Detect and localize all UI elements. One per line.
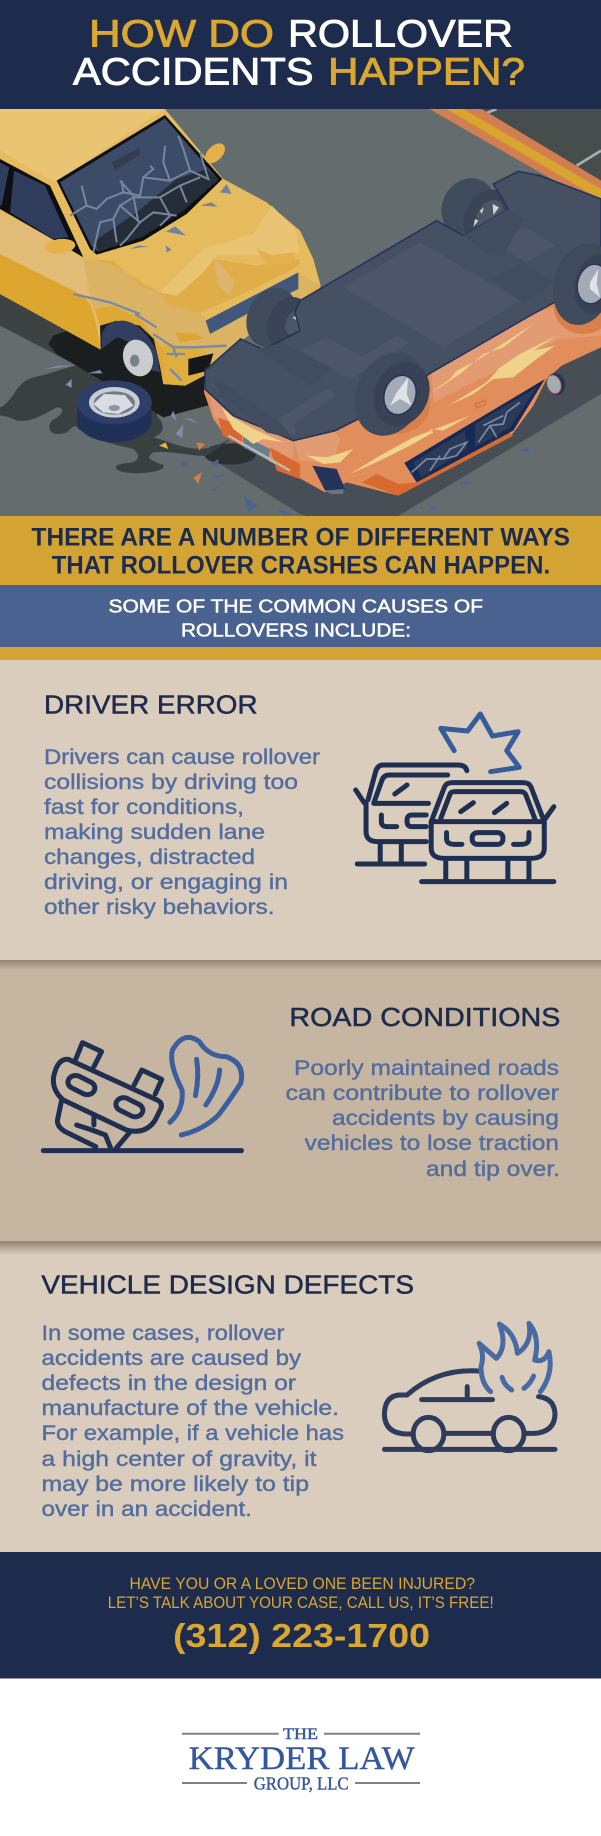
side windows xyxy=(0,159,83,257)
text: vehicle design defects: manufacture of the vehicle. xyxy=(42,1397,339,1420)
text: driver error: driving, or engaging in xyxy=(44,871,288,894)
windshield xyxy=(57,115,222,255)
statement text: THAT ROLLOVER CRASHES CAN HAPPEN. xyxy=(52,552,550,580)
logo: the kryder law group: GROUP, LLC xyxy=(254,1773,349,1793)
gold divider strip xyxy=(0,647,601,660)
panel: road conditions xyxy=(0,960,601,1241)
heading: vehicle design defects: VEHICLE DESIGN DEFECTS xyxy=(41,1269,414,1299)
causes text: ROLLOVERS INCLUDE: xyxy=(181,620,411,641)
call to action footer xyxy=(0,1552,601,1678)
orange car xyxy=(204,169,601,496)
headlight block xyxy=(312,466,345,494)
mirrors xyxy=(44,238,76,254)
text: vehicle design defects: In some cases, rollover xyxy=(42,1322,284,1345)
text: vehicle design defects: over in an accident. xyxy=(42,1498,252,1521)
panel: driver error xyxy=(0,660,601,960)
text: road conditions: and tip over. xyxy=(426,1158,560,1181)
title text: HOW DO xyxy=(89,14,274,56)
statement text: THERE ARE A NUMBER OF DIFFERENT WAYS xyxy=(32,524,570,552)
icon: burning car xyxy=(384,1323,555,1451)
blue causes band xyxy=(0,585,601,647)
underside xyxy=(205,171,601,441)
text: vehicle design defects: may be more likely to tip xyxy=(42,1473,309,1496)
call to action text: HAVE YOU OR A LOVED ONE BEEN INJURED? xyxy=(130,1574,475,1593)
license plate and chrome bar xyxy=(228,436,290,471)
heading: driver error: DRIVER ERROR xyxy=(44,689,258,719)
cracked bumper xyxy=(73,294,227,381)
logo: the kryder law group xyxy=(0,1678,601,1836)
phone number: (312) 223-1700 xyxy=(173,1617,430,1654)
text: road conditions: accidents by causing xyxy=(332,1107,559,1130)
wheels behind body xyxy=(237,169,518,355)
text: driver error: changes, distracted xyxy=(44,846,255,869)
text: driver error: fast for conditions, xyxy=(44,796,244,819)
wheel arch and wheel xyxy=(101,321,163,384)
debris xyxy=(45,184,529,515)
orange body xyxy=(204,304,601,496)
text: vehicle design defects: For example, if a vehicle has xyxy=(42,1422,344,1445)
causes text xyxy=(108,596,483,641)
title text: HAPPEN? xyxy=(328,52,525,94)
yellow car xyxy=(0,109,321,386)
logo: the kryder law group: KRYDER LAW xyxy=(189,1741,415,1777)
scrape marks xyxy=(222,324,557,474)
text: vehicle design defects: defects in the design or xyxy=(42,1372,296,1395)
text: driver error: Drivers can cause rollover xyxy=(44,746,320,769)
ground shadows and oil xyxy=(0,282,601,517)
call to action text xyxy=(108,1574,494,1612)
text: driver error xyxy=(44,746,320,919)
exposed wheels xyxy=(358,246,601,436)
text: road conditions: vehicles to lose traction xyxy=(305,1132,559,1155)
gold statement band xyxy=(0,516,601,585)
text: driver error: making sudden lane xyxy=(44,821,265,844)
title text xyxy=(73,14,525,94)
text: driver error: collisions by driving too xyxy=(44,771,298,794)
icon: overturned car with smoke xyxy=(43,1037,242,1151)
mirror xyxy=(546,373,566,395)
text: road conditions: Poorly maintained roads xyxy=(294,1057,559,1080)
panel: vehicle design defects xyxy=(0,1241,601,1552)
text: road conditions xyxy=(286,1057,560,1181)
call to action text: LET’S TALK ABOUT YOUR CASE, CALL US, IT’S FREE! xyxy=(108,1593,494,1612)
logo: the kryder law group: THE xyxy=(283,1726,318,1743)
text: road conditions: can contribute to rollover xyxy=(286,1082,559,1105)
crash illustration xyxy=(0,109,601,517)
title text: ACCIDENTS xyxy=(73,52,314,94)
title text: ROLLOVER xyxy=(288,14,513,56)
causes text: SOME OF THE COMMON CAUSES OF xyxy=(108,596,483,617)
title banner xyxy=(0,0,601,109)
icon: two cars colliding xyxy=(356,714,554,882)
heading: road conditions: ROAD CONDITIONS xyxy=(289,1002,560,1032)
underside panels xyxy=(257,209,509,438)
text: driver error: other risky behaviors. xyxy=(44,896,274,919)
text: vehicle design defects xyxy=(42,1322,344,1521)
wheel arches xyxy=(394,396,430,434)
side windows inverted xyxy=(404,379,545,482)
text: vehicle design defects: a high center of gravity, it xyxy=(42,1448,317,1471)
text: vehicle design defects: accidents are caused by xyxy=(42,1347,302,1370)
detached tire xyxy=(77,380,152,442)
statement text xyxy=(32,524,570,580)
